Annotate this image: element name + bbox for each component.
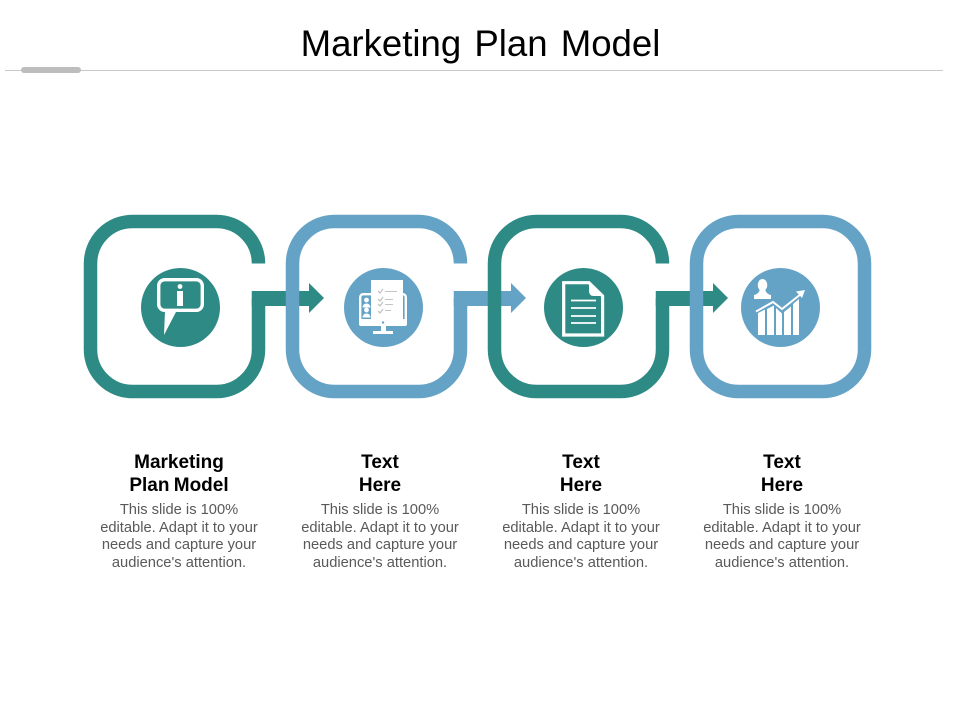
caption: Marketing Plan Model: audience's attention. bbox=[112, 555, 246, 571]
icon: info speech bubble bbox=[141, 268, 220, 347]
caption: step 4: Text bbox=[763, 452, 801, 473]
step 4 frame bbox=[696, 222, 864, 392]
title: Marketing Plan Model bbox=[301, 23, 660, 64]
caption: step 3: needs and capture your bbox=[504, 537, 658, 553]
icon: document bbox=[544, 268, 623, 347]
icon: person with growth chart bbox=[741, 268, 820, 347]
step 1 frame with arrow bbox=[90, 222, 324, 392]
caption: step 4: needs and capture your bbox=[705, 537, 859, 553]
title accent pill bbox=[21, 67, 81, 73]
caption: Marketing Plan Model bbox=[100, 452, 258, 571]
caption: step 4: Here bbox=[761, 475, 803, 496]
caption: step 3: audience's attention. bbox=[514, 555, 648, 571]
caption: step 3: Here bbox=[560, 475, 602, 496]
caption: step 2: editable. Adapt it to your bbox=[301, 520, 459, 536]
step 3 frame with arrow bbox=[494, 222, 728, 392]
caption: Marketing Plan Model: Plan Model bbox=[129, 475, 229, 496]
caption: Marketing Plan Model: needs and capture your bbox=[102, 537, 256, 553]
step 2 frame with arrow bbox=[292, 222, 526, 392]
caption: step 3 bbox=[502, 452, 660, 571]
caption: step 2: audience's attention. bbox=[313, 555, 447, 571]
caption: step 4 bbox=[703, 452, 861, 571]
caption: step 2: Text bbox=[361, 452, 399, 473]
caption: Marketing Plan Model: editable. Adapt it to your bbox=[100, 520, 258, 536]
caption: step 2: This slide is 100% bbox=[321, 502, 439, 518]
caption: step 2 bbox=[301, 452, 459, 571]
caption: Marketing Plan Model: Marketing bbox=[134, 452, 224, 473]
caption: step 2: Here bbox=[359, 475, 401, 496]
caption: step 3: Text bbox=[562, 452, 600, 473]
caption: step 3: editable. Adapt it to your bbox=[502, 520, 660, 536]
caption: step 4: audience's attention. bbox=[715, 555, 849, 571]
caption: step 2: needs and capture your bbox=[303, 537, 457, 553]
caption: step 4: editable. Adapt it to your bbox=[703, 520, 861, 536]
icon: monitor with checklist bbox=[344, 268, 423, 347]
caption: Marketing Plan Model: This slide is 100% bbox=[120, 502, 238, 518]
caption: step 3: This slide is 100% bbox=[522, 502, 640, 518]
caption: step 4: This slide is 100% bbox=[723, 502, 841, 518]
